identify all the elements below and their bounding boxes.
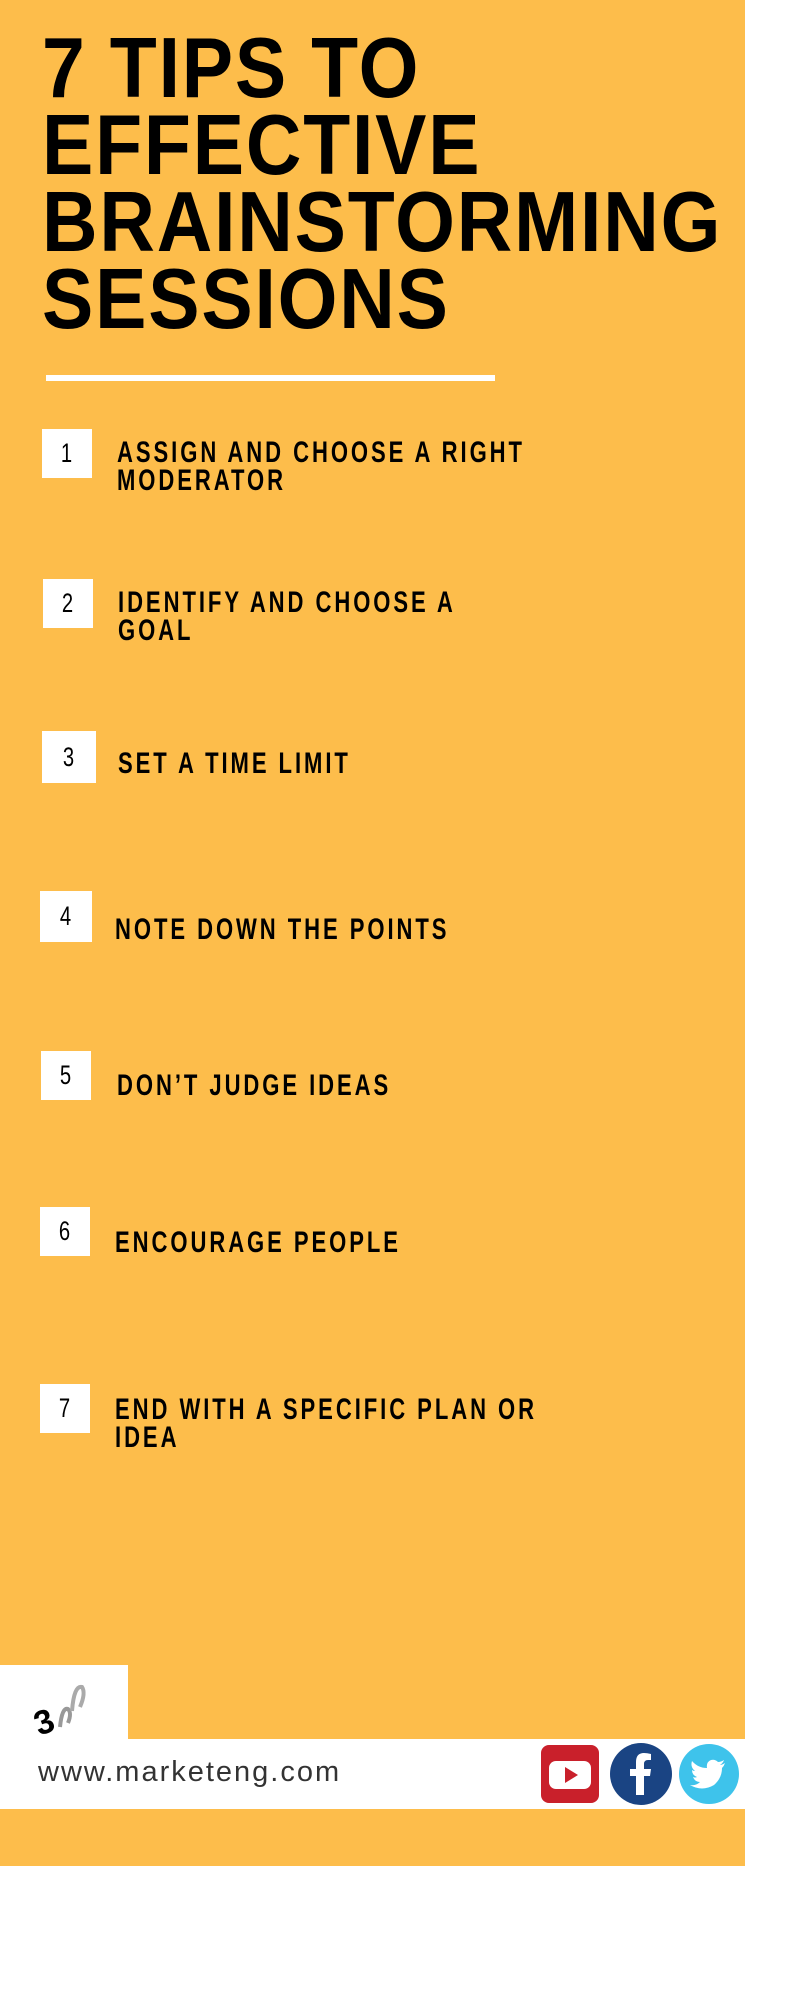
tip text 7 bbox=[115, 1393, 537, 1454]
number box 6: 6 bbox=[59, 1216, 71, 1246]
tip 4 bbox=[40, 891, 449, 946]
tip 7 bbox=[40, 1384, 537, 1454]
number box 5 bbox=[41, 1051, 91, 1100]
title: BRAINSTORMING bbox=[42, 175, 722, 270]
title: 7 TIPS TO bbox=[42, 21, 420, 116]
tip text 2: GOAL bbox=[118, 614, 193, 647]
number box 1 bbox=[42, 429, 92, 478]
icon: twitter bbox=[679, 1744, 739, 1804]
number box 7: 7 bbox=[59, 1393, 71, 1423]
number box 3: 3 bbox=[63, 742, 75, 772]
number box 5: 5 bbox=[60, 1060, 72, 1090]
tip 6 bbox=[40, 1207, 401, 1259]
tip text 3: SET A TIME LIMIT bbox=[118, 747, 351, 780]
tip text 1 bbox=[117, 436, 525, 497]
title underline bbox=[46, 375, 495, 381]
icon: facebook bbox=[610, 1743, 672, 1805]
tip text 4: NOTE DOWN THE POINTS bbox=[115, 913, 449, 946]
title: SESSIONS bbox=[42, 252, 450, 347]
footer white band bbox=[0, 1739, 745, 1809]
icon: youtube bbox=[541, 1745, 599, 1803]
number box 7 bbox=[40, 1384, 90, 1433]
title: EFFECTIVE bbox=[42, 98, 481, 193]
number box 3 bbox=[42, 731, 96, 783]
logo mark bbox=[29, 1684, 86, 1740]
tip text 1: ASSIGN AND CHOOSE A RIGHT bbox=[117, 436, 525, 469]
tip 2 bbox=[43, 579, 456, 647]
tip text 7: END WITH A SPECIFIC PLAN OR bbox=[115, 1393, 537, 1426]
tip text 6: ENCOURAGE PEOPLE bbox=[115, 1226, 401, 1259]
number box 2: 2 bbox=[62, 588, 74, 618]
tip text 2 bbox=[118, 586, 456, 647]
tip 5 bbox=[41, 1051, 391, 1102]
tip text 5: DON’T JUDGE IDEAS bbox=[117, 1069, 391, 1102]
number box 4: 4 bbox=[60, 901, 72, 931]
number box 2 bbox=[43, 579, 93, 628]
website url: www.marketeng.com bbox=[38, 1756, 341, 1788]
tip text 1: MODERATOR bbox=[117, 464, 286, 497]
tip 1 bbox=[42, 429, 525, 497]
tip text 7: IDEA bbox=[115, 1421, 179, 1454]
logo box bbox=[0, 1665, 128, 1740]
number box 1: 1 bbox=[61, 438, 73, 468]
number box 6 bbox=[40, 1207, 90, 1256]
tip 3 bbox=[42, 731, 351, 783]
number box 4 bbox=[40, 891, 92, 942]
tip text 2: IDENTIFY AND CHOOSE A bbox=[118, 586, 456, 619]
title bbox=[42, 21, 722, 347]
